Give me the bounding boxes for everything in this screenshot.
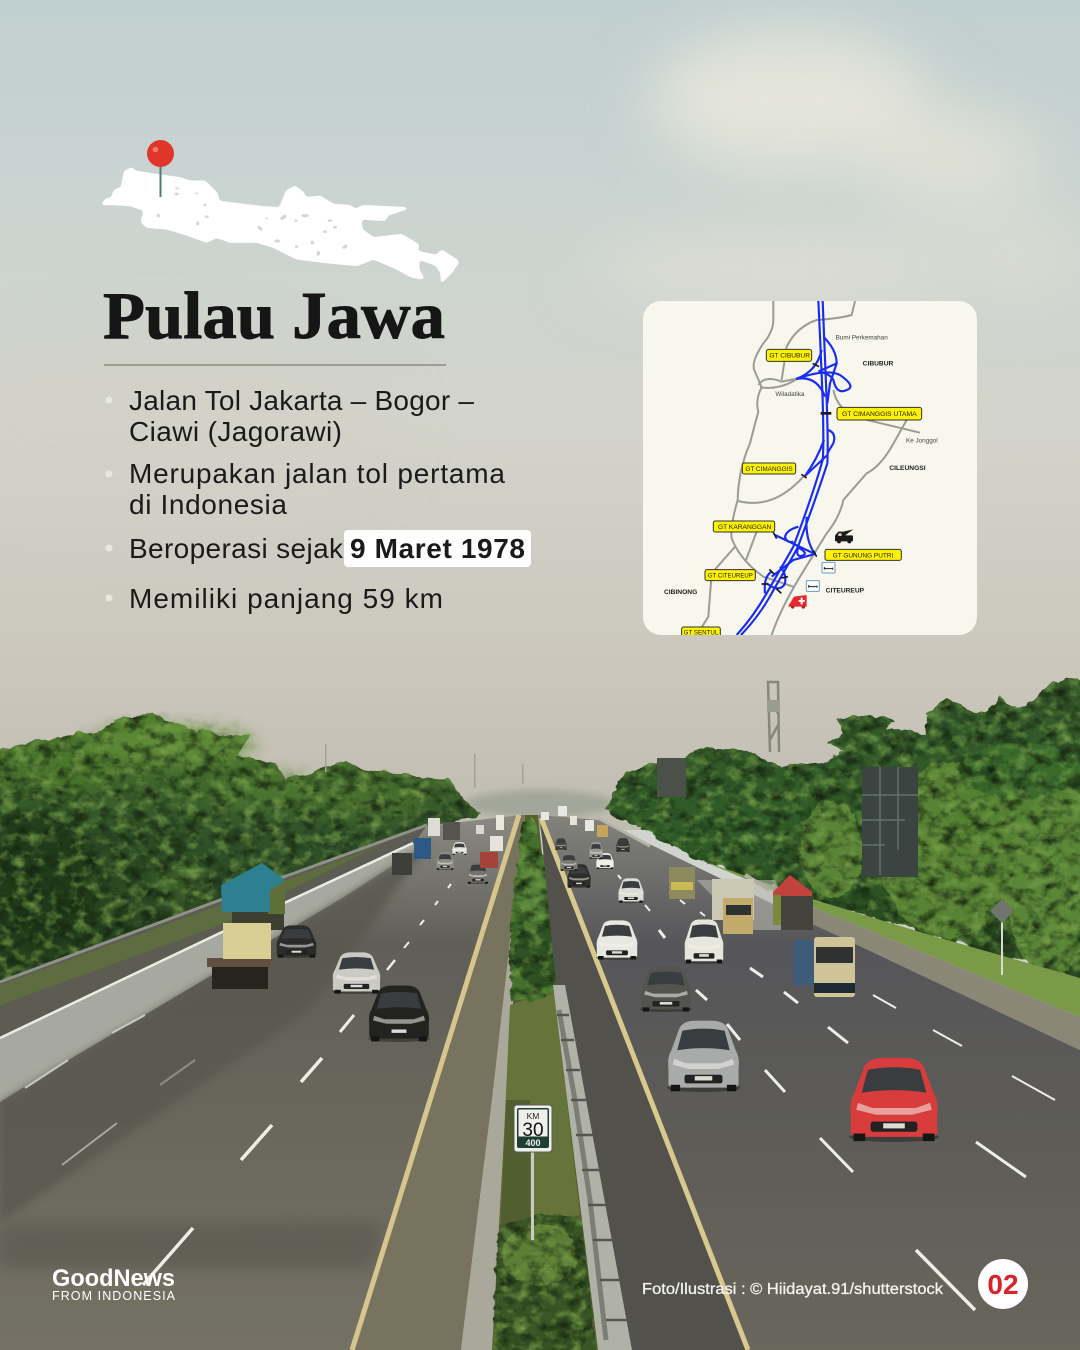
km marker sign: 30 (522, 1120, 544, 1141)
bullet: operating since: Beroperasi sejak (129, 533, 344, 564)
left carriageway (0, 815, 521, 1350)
central median (352, 815, 630, 1350)
red tarp truck (773, 875, 813, 930)
map: gate labels (682, 349, 922, 637)
title: Pulau Jawa (103, 279, 445, 353)
map: gate labels: GT CIMANGGIS UTAMA (842, 411, 917, 418)
logo: GoodNews from Indonesia: GoodNews (52, 1265, 175, 1292)
title divider (104, 364, 446, 366)
left lane markings (25, 884, 451, 1285)
bullet: first toll road: Merupakan jalan tol pertama (129, 458, 505, 489)
bullet: first toll road: di Indonesia (129, 489, 287, 520)
map: small labels: Bumi Perkemahan (836, 335, 888, 342)
map: gate labels: GT CIMANGGIS (745, 466, 793, 473)
traffic: left carriageway (207, 815, 504, 1042)
map: place names: CITEUREUP (826, 587, 865, 594)
water tanker truck (793, 937, 855, 997)
map: gate labels: GT GUNUNG PUTRI (833, 552, 893, 559)
yellow small truck (669, 867, 695, 899)
map: blue toll road (737, 301, 850, 635)
background: sky (0, 0, 1080, 830)
bullet list (106, 385, 531, 614)
icon: rest area bed 1 (822, 562, 835, 573)
bullet: operating since: 9 Maret 1978 (350, 533, 525, 564)
map: place names (664, 360, 926, 596)
icon: rest area bed 2 (806, 581, 819, 591)
background: left tree line (0, 713, 480, 990)
page number badge: 02 (987, 1269, 1019, 1300)
map: place names: CILEUNGSI (889, 465, 926, 472)
traffic: right carriageway (541, 806, 939, 1142)
photo credit: Foto/Ilustrasi : © Hiidayat.91/shutterstock (642, 1281, 943, 1298)
km marker sign (514, 1105, 552, 1240)
bullet: length: Memiliki panjang 59 km (129, 583, 443, 614)
map: gate labels: GT CITEUREUP (708, 573, 753, 580)
right lane markings (606, 860, 1055, 1310)
icon: Java island map with pin (102, 140, 458, 282)
bullet: operating since (106, 530, 531, 567)
map: grey local roads (700, 301, 920, 635)
page number badge (978, 1259, 1028, 1309)
logo: GoodNews from Indonesia: FROM INDONESIA (52, 1289, 176, 1303)
bullet: Jagorawi toll road: Jalan Tol Jakarta – Bogor – (129, 385, 474, 416)
map: small labels: Ke Jonggol (906, 437, 938, 444)
map: gate labels: GT CIBUBUR (769, 353, 810, 360)
red car (849, 1058, 939, 1142)
median bushes (492, 820, 598, 1350)
icon: ambulance (788, 595, 807, 609)
map: toll gate ticks (762, 363, 831, 593)
yellow box truck (712, 879, 754, 934)
right guard rail (553, 985, 632, 1350)
map: small labels: Wiladatika (775, 391, 805, 398)
map: gate labels: GT KARANGGAN (718, 524, 772, 531)
road sign on grass (990, 899, 1014, 975)
map: gate labels: GT SENTUL (684, 630, 719, 637)
map: place names: CIBUBUR (863, 360, 894, 367)
truck with blue tarp (221, 863, 285, 930)
background: distant haze trees (465, 790, 615, 818)
background: right tree line (605, 677, 1080, 982)
background: billboards and tower (325, 682, 918, 877)
map: place names: CIBINONG (664, 589, 697, 596)
map: small labels (775, 335, 938, 444)
right carriageway (538, 815, 1080, 1350)
km marker sign: KM (527, 1111, 539, 1121)
cream flatbed truck (207, 923, 271, 989)
icon: tow truck (835, 529, 853, 543)
km marker sign: 400 (525, 1138, 541, 1148)
panel: toll road map (643, 301, 977, 637)
bullet: Jagorawi toll road (106, 385, 474, 447)
bullet: first toll road (106, 458, 505, 520)
bullet: Jagorawi toll road: Ciawi (Jagorawi) (129, 416, 342, 447)
